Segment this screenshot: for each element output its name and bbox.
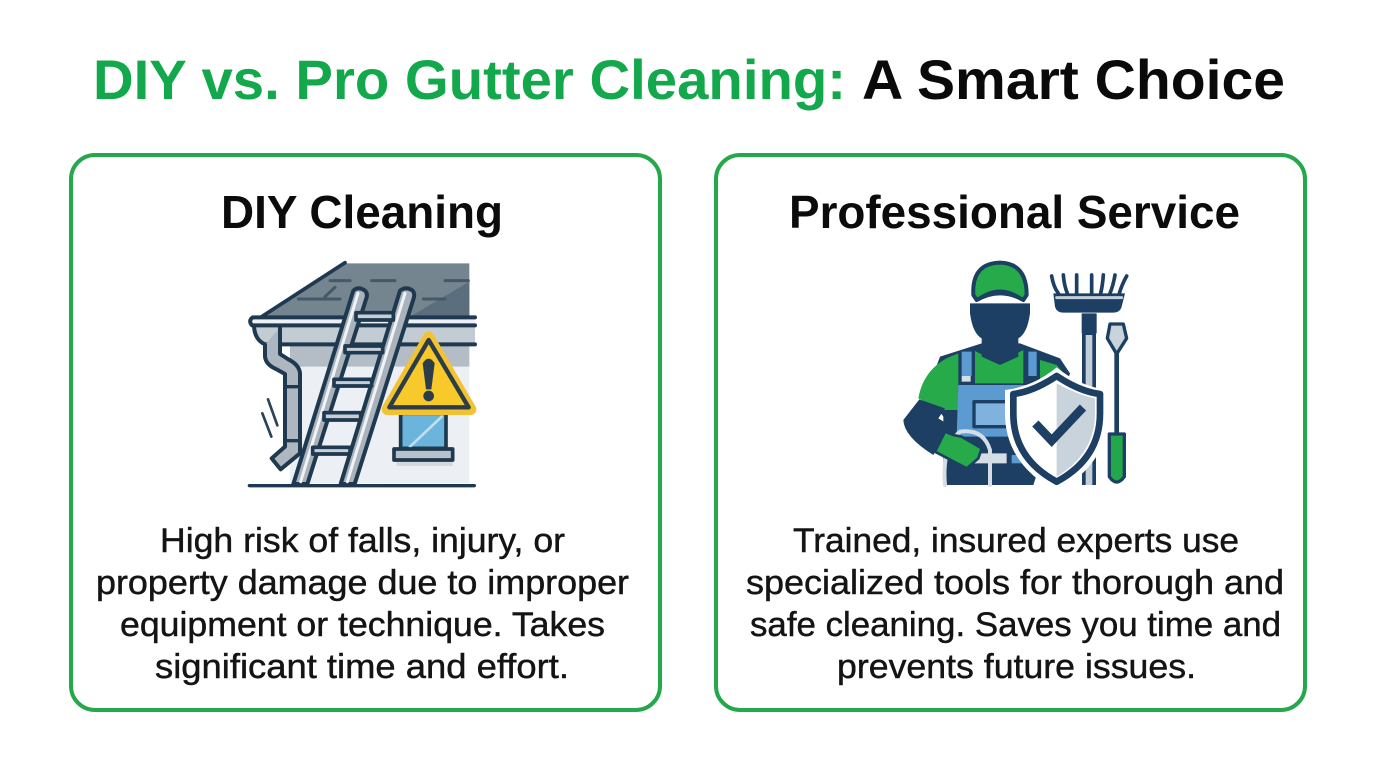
torso and shirt bbox=[927, 343, 1070, 485]
head and cap bbox=[970, 303, 1030, 365]
text: DIY description bbox=[96, 522, 629, 686]
ground bbox=[249, 481, 474, 491]
window bbox=[401, 413, 446, 448]
rake bbox=[1068, 330, 1110, 485]
warning sign bbox=[387, 337, 471, 409]
glove and hose bbox=[944, 431, 990, 485]
icon: worker with shield and tools bbox=[903, 263, 1127, 492]
panel: professional service bbox=[716, 155, 1305, 710]
heading: DIY Cleaning: DIY Cleaning bbox=[221, 186, 503, 238]
motion marks bbox=[262, 399, 277, 437]
text: professional description: Trained, insured experts use bbox=[793, 522, 1239, 560]
heading: Professional Service: Professional Service bbox=[789, 186, 1240, 238]
text: DIY description: High risk of falls, injury, or bbox=[160, 522, 565, 560]
title: A Smart Choice bbox=[862, 48, 1285, 111]
text: professional description: specialized tools for thorough and bbox=[746, 564, 1284, 602]
text: DIY description: significant time and effort. bbox=[155, 648, 569, 686]
icon: gutter, ladder and warning sign bbox=[249, 263, 475, 486]
text: DIY description: equipment or technique. Takes bbox=[120, 606, 605, 644]
title bbox=[93, 48, 1285, 111]
gutter bbox=[254, 326, 475, 344]
title: DIY vs. Pro Gutter Cleaning: bbox=[93, 48, 846, 111]
text: DIY description: property damage due to improper bbox=[96, 564, 629, 602]
screwdriver bbox=[1110, 350, 1124, 437]
wall bbox=[290, 343, 469, 483]
overalls bbox=[962, 352, 1037, 376]
text: professional description: safe cleaning. Saves you time and bbox=[750, 606, 1281, 644]
text: professional description bbox=[746, 522, 1284, 686]
downspout bbox=[265, 327, 300, 469]
text: professional description: prevents future issues. bbox=[837, 648, 1196, 686]
ladder bbox=[293, 288, 414, 484]
arm bbox=[903, 399, 952, 455]
panel: DIY cleaning bbox=[71, 155, 660, 710]
roof bbox=[262, 263, 469, 317]
shield bbox=[1005, 367, 1108, 492]
